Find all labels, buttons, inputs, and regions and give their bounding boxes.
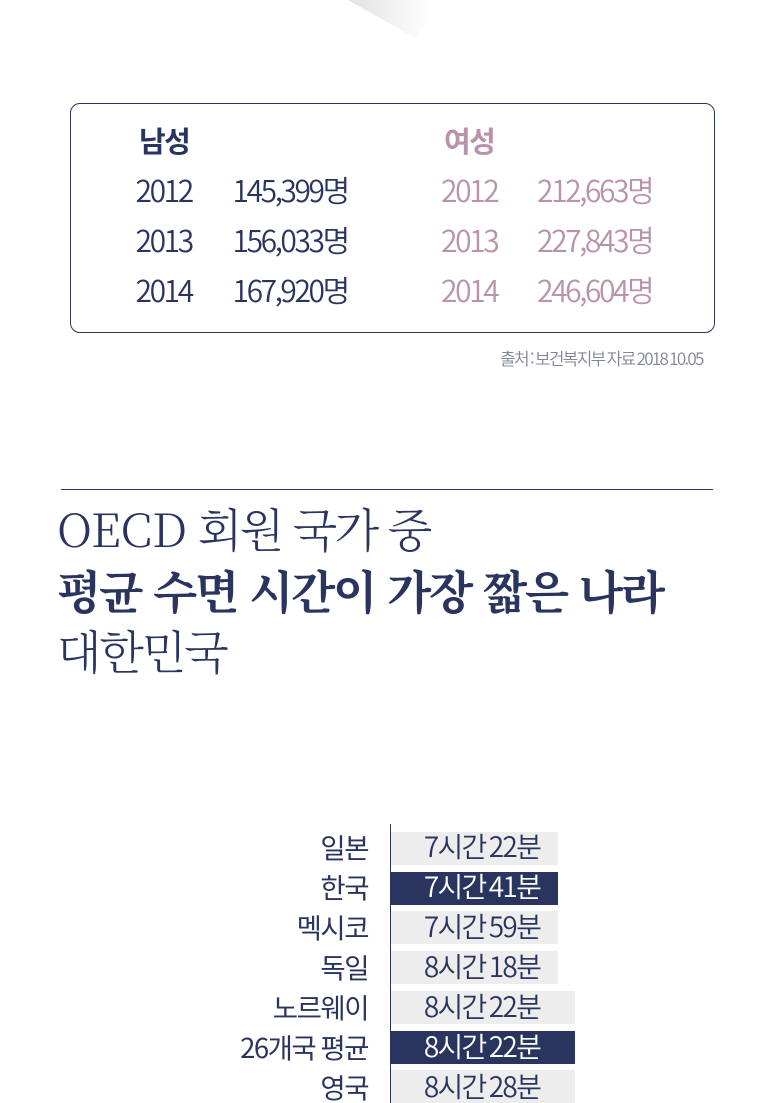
bar: UK [391,1070,575,1103]
female 2012 row [441,167,652,211]
female 2014 row: 246,604명 [537,267,652,311]
title line 3: 대한민국 [57,617,227,683]
female 2012 row: 212,663명 [537,167,652,211]
heading rule [61,489,713,490]
female 2012 row: 2012 [441,167,497,211]
male 2013 row: 2013 [136,217,192,261]
male 2012 row: 2012 [136,167,192,211]
bar: Norway [391,991,575,1024]
chart axis [390,824,391,1103]
chart: sleep time by country [390,824,391,1103]
male 2013 row [136,217,348,261]
female 2014 row: 2014 [441,267,497,311]
bar: 26-country average [390,1031,575,1064]
label: Mexico: 멕시코 [297,906,368,946]
label: Norway: 노르웨이 [273,986,368,1026]
value: Germany: 8시간 18분 [424,946,540,986]
bar: Germany [391,951,558,984]
female 2014 row [441,267,652,311]
value: Korea: 7시간 41분 [424,866,540,906]
value: Mexico: 7시간 59분 [424,906,540,946]
label: average: 26개국 평균 [240,1026,368,1066]
male 2014 row: 167,920명 [232,267,348,311]
source note: 출처 : 보건복지부 자료 2018 10.05 [500,345,703,370]
bar: Korea [390,872,558,905]
label: Germany: 독일 [320,946,368,986]
label: Japan: 일본 [320,826,368,866]
title [57,495,666,683]
male 2013 row: 156,033명 [232,217,348,261]
male 2014 row [136,267,348,311]
female 2013 row: 2013 [441,217,497,261]
decorative gradient shape at top [348,0,408,34]
panel: gender statistics table [70,103,715,333]
heading: male: 남성 [139,119,189,161]
female 2013 row [441,217,652,261]
male 2012 row [136,167,348,211]
value: Norway: 8시간 22분 [424,986,540,1026]
title line 1: OECD 회원 국가 중 [57,495,430,561]
value: Japan: 7시간 22분 [424,826,540,866]
value: average: 8시간 22분 [424,1026,540,1066]
label: Korea: 한국 [320,866,368,906]
title line 2: 평균 수면 시간이 가장 짧은 나라 [57,557,663,623]
male 2012 row: 145,399명 [232,167,348,211]
heading: female: 여성 [444,119,494,161]
bar: Japan [391,832,558,865]
female 2013 row: 227,843명 [537,217,652,261]
male 2014 row: 2014 [136,267,192,311]
bar: Mexico [391,911,558,944]
